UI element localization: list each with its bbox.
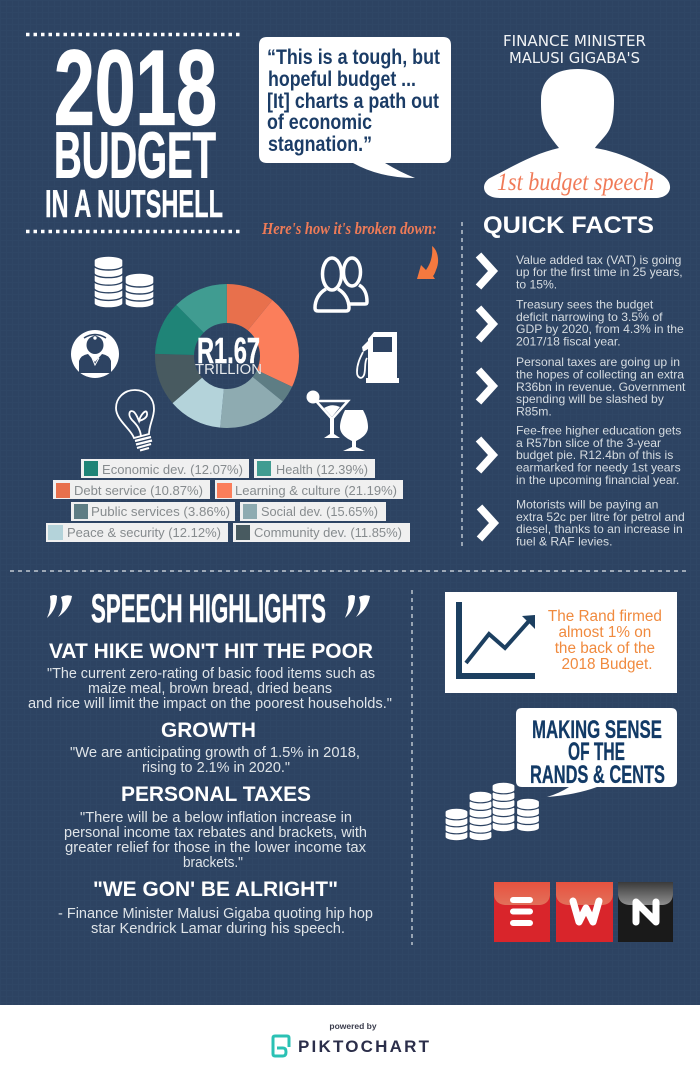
panel: quick facts [478,212,686,548]
fact 3: R36bn in revenue. Government [516,380,686,394]
powered by: powered by [329,1021,377,1031]
legend item: peace and security: Peace & security (12.12%) [67,525,221,540]
legend item: social dev [240,502,386,521]
fact 3: the hopes of collecting an extra [516,368,684,382]
fact 3: Personal taxes are going up in [516,355,680,369]
highlight: VAT hike [28,640,392,712]
highlight: VAT hike: "The current zero-rating of basic food items such as [47,665,375,682]
legend item: public services: Public services (3.86%) [91,504,230,519]
panel: finance minister [484,32,670,198]
speech bubble: quote: “This is a tough, but [267,46,440,69]
donut chart: TRILLION [195,362,262,378]
legend item: economic dev [81,459,249,478]
fact 4: Fee-free higher education gets [516,424,681,438]
fact 4: in the upcoming financial year. [516,473,679,487]
donut chart: R1.67 [197,330,260,371]
fact 2: deficit narrowing to 3.5% of [516,310,663,324]
title: budget: BUDGET [54,118,216,192]
icon: piktochart logo [273,1036,289,1056]
highlight: we gon' be alright: "WE GON' BE ALRIGHT" [93,878,338,901]
text: rand firmed: the back of the [555,640,655,657]
heading: finance minister: FINANCE MINISTER [503,32,646,50]
icon: silhouette [484,69,670,198]
icon: doctor [71,330,119,378]
donut chart [174,304,280,408]
legend item: economic dev: Economic dev. (12.07%) [102,462,243,477]
highlight: personal taxes: PERSONAL TAXES [121,783,311,806]
fact 2: GDP by 2020, from 4.3% in the [516,322,684,336]
fact 2: 2017/18 fiscal year. [516,334,621,348]
legend item: peace and security [46,523,228,542]
label: 1st budget speech: 1st budget speech [497,169,654,196]
fact 3: spending will be slashed by [516,392,665,406]
fact 4: earmarked for needy 1st years [516,460,681,474]
highlight: growth: "We are anticipating growth of 1.5% in 2018, [70,744,360,761]
fact 1 [478,253,683,292]
callout: how it's broken down: Here's how it's broken down: [261,219,437,238]
legend item: health: Health (12.39%) [276,462,368,477]
highlight: VAT hike: VAT HIKE WON'T HIT THE POOR [49,640,373,663]
text: rand firmed: 2018 Budget. [561,656,653,673]
fact 1: up for the first time in 25 years, [516,265,683,279]
highlight: growth: rising to 2.1% in 2020." [142,759,290,776]
fact 5: Motorists will be paying an [516,498,658,512]
fact 1: Value added tax (VAT) is going [516,253,681,267]
highlight: personal taxes [64,783,367,871]
fact 5: fuel & RAF levies. [516,534,612,548]
fact 2 [478,298,684,348]
heading: speech highlights: SPEECH HIGHLIGHTS [91,587,326,631]
title: in a nutshell: IN A NUTSHELL [45,183,223,226]
text: rand firmed: The Rand firmed [548,608,662,625]
coins: small stacks [445,782,540,841]
piktochart wordmark: PIKTOCHART [298,1037,430,1056]
legend item: community dev: Community dev. (11.85%) [254,525,402,540]
highlight: growth [70,719,360,776]
legend item: social dev: Social dev. (15.65%) [261,504,378,519]
arrow: orange curved [417,246,438,279]
fact 4 [478,424,681,487]
speech bubble: quote: of economic [267,111,372,134]
icon: drinks [306,390,368,451]
fact 5: diesel, thanks to an increase in [516,522,683,536]
fact 4: a R57bn slice of the 3-year [516,436,661,450]
highlight: we gon' be alright [58,878,373,937]
speech bubble: quote: hopeful budget ... [268,68,416,91]
footer [0,1005,700,1074]
logo tile: E [494,882,550,942]
highlight: VAT hike: maize meal, brown bread, dried beans [88,680,332,697]
highlight: we gon' be alright: star Kendrick Lamar during his speech. [91,920,345,937]
title: 2018: 2018 [54,28,217,148]
legend item: public services [71,502,235,521]
fact 3 [478,355,686,418]
highlight: personal taxes: greater relief for those in the lower income tax [65,839,366,856]
fact 3: R85m. [516,404,552,418]
legend item: health [254,459,375,478]
fact 5 [480,498,685,548]
fact 4: budget pie. R12.4bn of this is [516,448,673,462]
speech bubble: making sense: OF THE [568,738,625,766]
icon: light bulb [116,390,154,450]
legend item: learning and culture: Learning & culture (21.19%) [235,483,397,498]
legend item: debt service: Debt service (10.87%) [74,483,203,498]
speech bubble: quote: [It] charts a path out [267,90,439,113]
legend item: learning and culture [215,480,403,499]
highlight: VAT hike: and rice will limit the impact on the poorest households." [28,695,392,712]
icon: people [315,258,367,311]
logo tile: N [618,882,673,942]
legend item: debt service [53,480,210,499]
heading: speech highlights [47,587,370,631]
heading: finance minister: MALUSI GIGABA'S [509,49,640,67]
icon: line chart [456,602,535,679]
icon: coin stacks [94,256,154,308]
legend item: community dev [233,523,410,542]
panel: speech highlights [28,587,392,937]
speech bubble: quote: stagnation.” [268,133,372,156]
highlight: growth: GROWTH [161,719,256,742]
fact 1: to 15%. [516,278,557,292]
heading: quick facts: QUICK FACTS [483,212,654,239]
icon: fuel pump [357,332,399,383]
speech bubble: making sense [516,708,677,797]
highlight: personal taxes: "There will be a below inflation increase in [80,809,352,826]
highlight: personal taxes: brackets." [183,854,243,871]
fact 2: Treasury sees the budget [516,298,654,312]
text: rand firmed: almost 1% on [559,624,651,641]
logo tile: W [556,882,613,942]
logo: EWN [494,882,673,942]
highlight: we gon' be alright: - Finance Minister Malusi Gigaba quoting hip hop [58,905,373,922]
panel: rand callout [445,592,677,693]
legend [46,459,410,542]
panel: title block [26,28,240,232]
fact 5: extra 52c per litre for petrol and [516,510,685,524]
speech bubble: quote [259,37,451,178]
highlight: personal taxes: personal income tax rebates and brackets, with [64,824,367,841]
